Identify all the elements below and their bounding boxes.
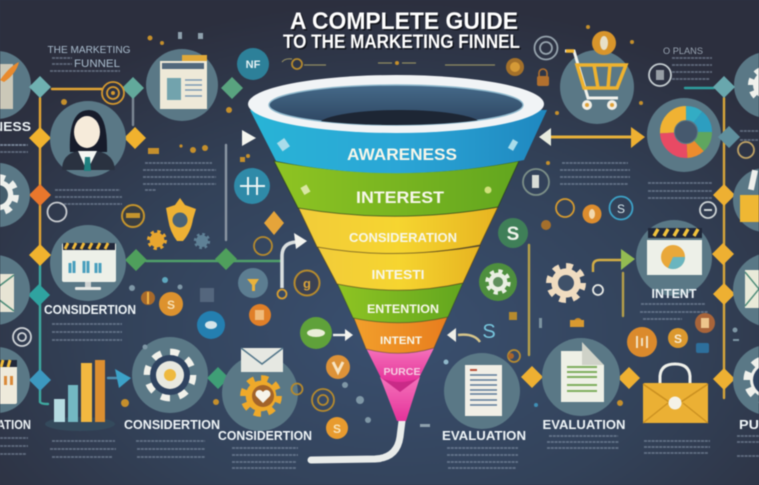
title: TO THE MARKETING FINNEL [283,31,520,53]
icon: spiral ring [13,328,31,346]
arrow: green curved [593,249,635,272]
arrow: chart to gear [115,369,131,388]
funnel rim [248,75,544,140]
text block: right upper [560,46,759,198]
node: donut chart [647,98,721,172]
small coins and icons left of funnel: g [303,276,311,291]
icon: green badge with arrow [300,317,353,349]
icon: gold pin and gears [149,198,209,248]
label: evaluation 1 [442,428,526,468]
band: intent: INTENT [380,335,422,347]
label: intent: INTENT [652,286,697,301]
subtitle: the marketing funnel: FUNNEL [74,58,120,70]
title: A COMPLETE GUIDE [290,8,518,35]
funnel tip [380,377,420,421]
node: shopping cart [560,50,634,124]
band: intent [353,316,448,353]
title [283,8,522,54]
node: envelope left [0,255,30,325]
label: consideration 1 [44,302,136,340]
band: consideration: CONSIDERATION [349,230,457,245]
small coins centre right [508,312,715,362]
arrow: double headed [539,127,645,148]
band: consideration [298,207,498,254]
label: consideration 2: CONSIDERTION [124,417,220,432]
small marks under title [282,59,495,69]
label: purchase: PU [739,417,759,432]
icon: envelope [241,348,283,372]
node: gold envelope right [700,142,759,232]
bar chart [45,360,116,457]
donut segments [667,113,705,151]
node: clapper with pie [636,220,712,296]
node: target gear [132,337,208,413]
icon: cream gear [549,266,603,300]
icon: gold coin [592,31,616,55]
band: entention [337,283,463,323]
title: TO THE MARKETING FINNEL [284,32,522,54]
label: evaluation 1: EVALUATION [442,428,526,443]
node: gear far right [733,345,759,415]
diamonds on right rail [521,76,740,390]
node: awareness [0,51,31,152]
node: gear right [734,52,759,118]
small coins and icons left of funnel: NF [246,59,261,71]
text block: right upper: O PLANS [663,46,703,56]
band: entention: ENTENTION [367,302,439,316]
arrow: curved white into funnel [278,233,307,298]
scattered small marks [61,25,739,427]
label: consideration 1: CONSIDERTION [44,302,136,317]
label: consideration 3 [218,428,312,468]
node: clapper card left [0,347,31,454]
connector lines right [529,88,724,398]
arrow: person to funnel [145,130,256,146]
node: gold gear heart [222,348,298,431]
band: awareness [250,110,547,173]
funnel pipe [311,421,402,460]
node: web page card [146,49,218,121]
band: interest [274,161,519,216]
band: purchase [366,348,434,382]
small coins and icons left of funnel [141,48,350,439]
band: intesti: INTESTI [372,267,424,282]
band: awareness: AWARENESS [347,145,457,164]
band: interest: INTEREST [356,188,445,207]
text block and badges left [0,145,216,227]
band: purchase: PURCE [384,367,421,378]
node: gear left [0,163,30,227]
label: consideration 2 [124,417,220,457]
label: evaluation 2 [542,417,626,448]
icons right of funnel: S [617,202,625,216]
node: evaluation document 1 [444,353,520,429]
icon: document and pen [0,62,19,109]
connector lines left [40,89,280,404]
label: purchase [737,417,759,456]
icons right of funnel: S [507,224,519,245]
subtitle: the marketing funnel: THE MARKETING [48,44,130,56]
label: intent [640,286,708,319]
node: evaluation document 2 [542,338,620,416]
arrow: white back to funnel [447,328,480,342]
icon: spiral target [102,82,124,104]
node: envelope far right [733,253,759,327]
small coins and icons left of funnel: S [333,422,341,436]
icons right of funnel: S [482,321,496,343]
band: intesti [317,246,480,290]
subtitle: the marketing funnel [48,44,130,71]
icon: gold bag envelope [643,364,710,453]
label: evaluation 2: EVALUATION [542,417,626,432]
node: person [50,101,126,177]
small coins and icons left of funnel: S [167,298,175,312]
funnel [248,75,547,460]
small coins centre right: S [674,332,682,346]
diamonds on left rail [28,76,243,391]
label: consideration 3: CONSIDERTION [218,428,312,443]
node: monitor [50,225,126,301]
icons right of funnel [479,36,632,343]
title: A COMPLETE GUIDE [292,10,520,36]
